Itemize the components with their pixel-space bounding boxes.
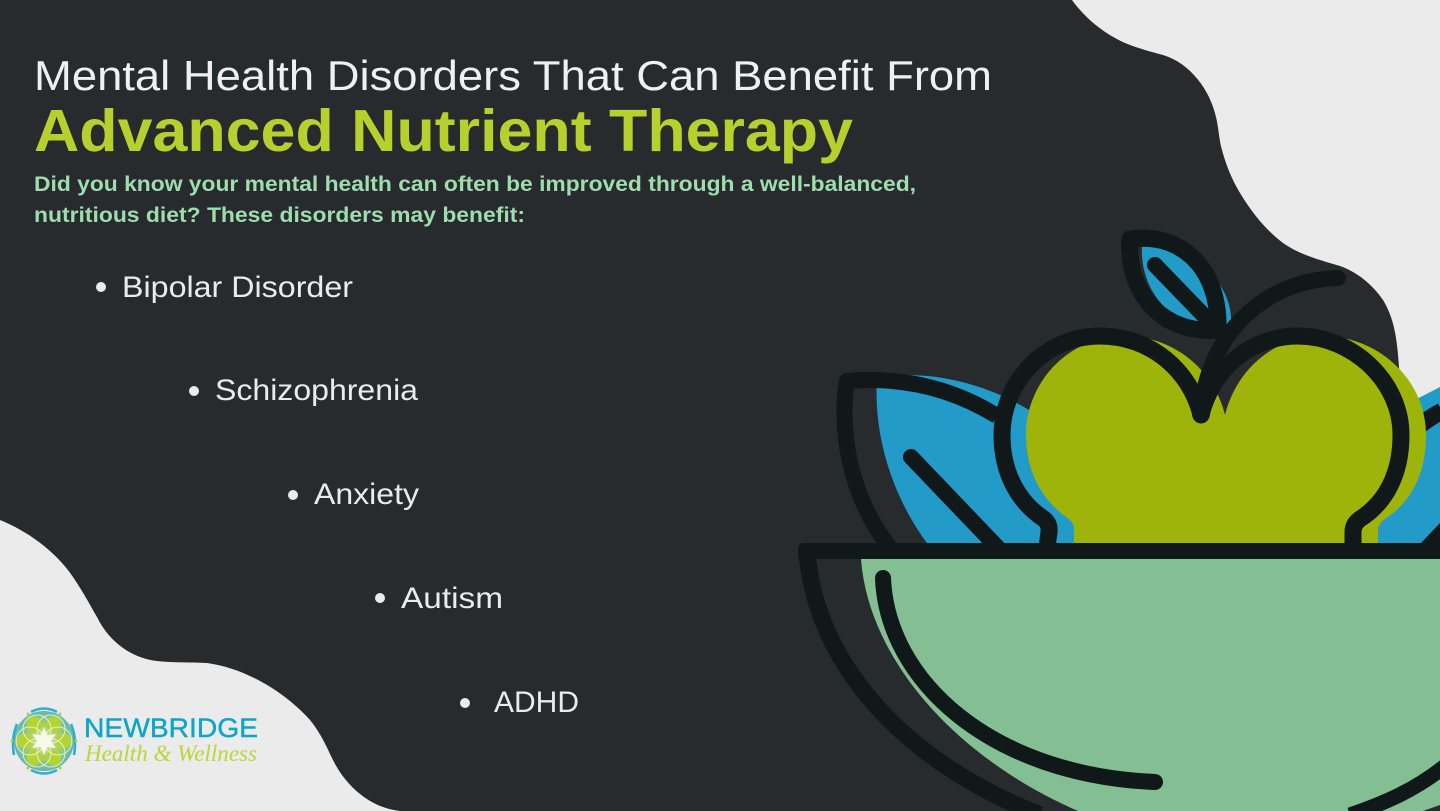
- list item: Bipolar Disorder: Bipolar Disorder: [122, 271, 353, 304]
- bowl outline right: [1350, 766, 1440, 811]
- logo tagline: Health & Wellness: [84, 741, 257, 766]
- bowl fill: [861, 559, 1440, 811]
- bowl rim: [798, 543, 1440, 559]
- list item: ADHD: ADHD: [494, 686, 579, 719]
- subtitle text block: Did you know your mental health can often be improved through a well-balanced,: [34, 172, 916, 196]
- left leaf: [844, 375, 1090, 550]
- logo wordmark: NEWBRIDGE: [84, 713, 258, 743]
- bowl outline left: [807, 552, 1040, 811]
- list item: Anxiety: Anxiety: [314, 478, 419, 511]
- bowl highlight arc: [883, 578, 1155, 782]
- icon: logo mandala: [10, 708, 78, 774]
- illustration: apple in a bowl: [798, 238, 1440, 811]
- top leaf: [1130, 238, 1231, 330]
- apple fill: [1026, 336, 1426, 548]
- right leaf: [1375, 387, 1440, 546]
- apple stem: [1192, 278, 1338, 423]
- background shape: top right light corner: [1072, 0, 1440, 425]
- subtitle text block: nutritious diet? These disorders may benefit:: [34, 203, 525, 227]
- list item: Schizophrenia: Schizophrenia: [215, 374, 418, 407]
- subtitle text block: [34, 172, 916, 227]
- title: highlighted line: Advanced Nutrient Therapy: [34, 98, 853, 164]
- logo: Newbridge Health and Wellness: [10, 708, 258, 774]
- list item: Autism: Autism: [401, 582, 503, 615]
- title: first line: Mental Health Disorders That Can Benefit From: [34, 52, 992, 99]
- apple outline: [1002, 336, 1401, 548]
- background shape: bottom left light corner: [0, 520, 400, 811]
